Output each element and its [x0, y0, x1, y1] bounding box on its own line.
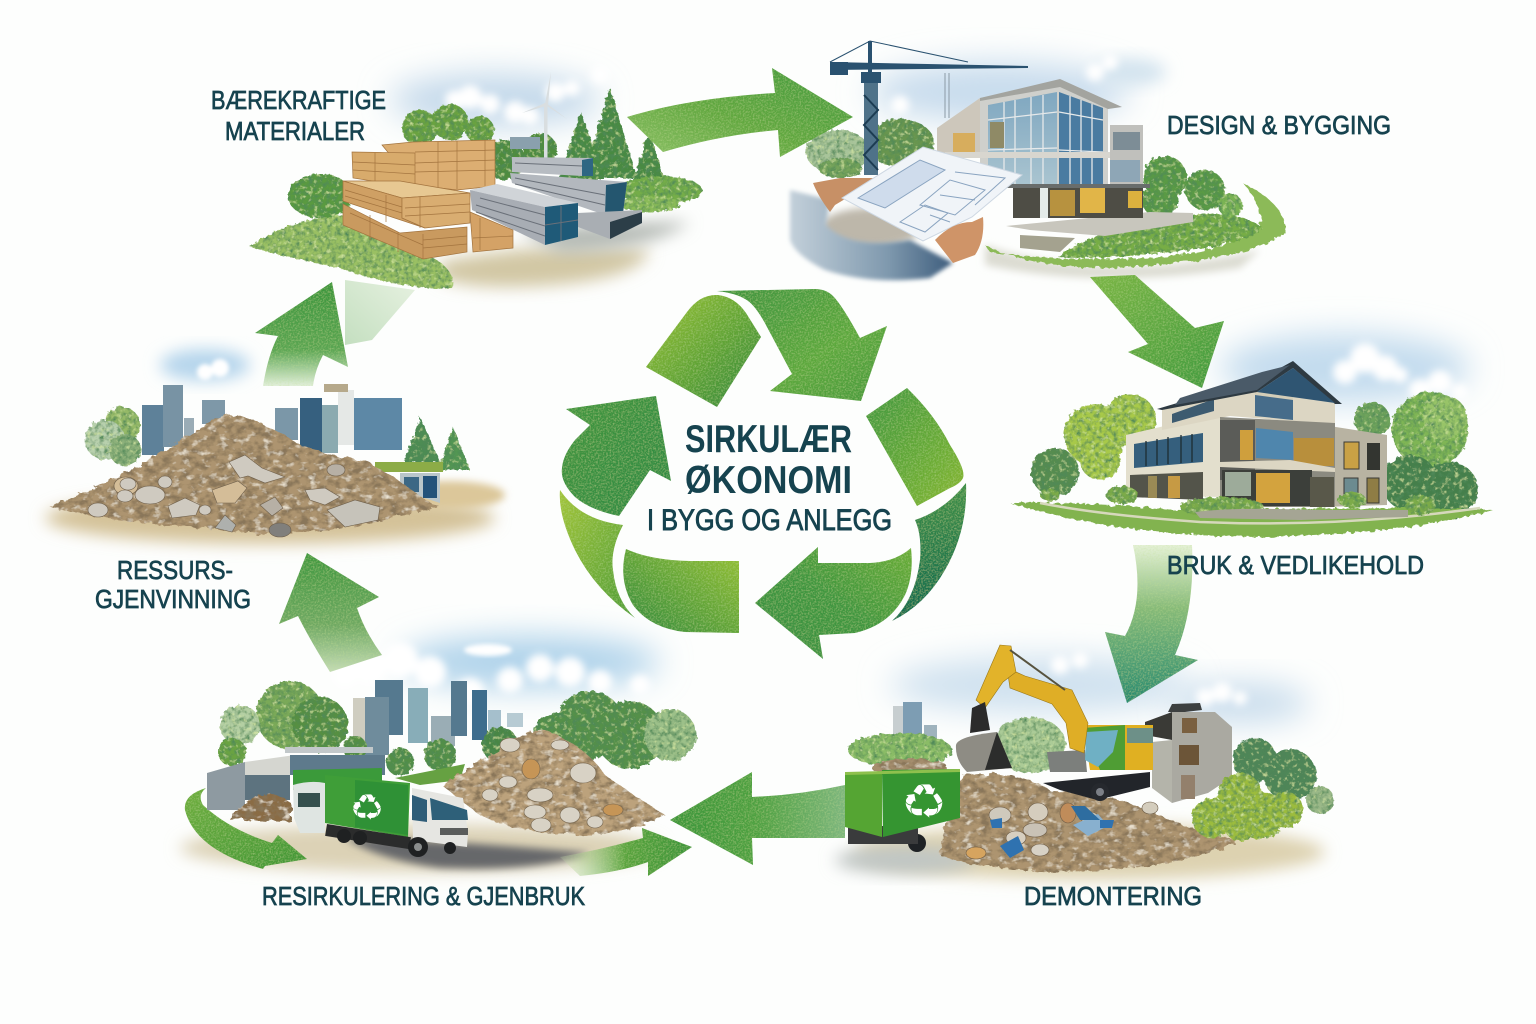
low structure and hedge [375, 462, 443, 503]
sky [160, 349, 250, 381]
terrace [1195, 509, 1408, 520]
yellow-green shrub [1192, 773, 1303, 841]
residential building [1126, 361, 1387, 507]
arrow: materials to design [627, 68, 853, 157]
background trees [848, 717, 1334, 814]
label: resource recovery: GJENVINNING [95, 584, 251, 614]
arrow: recycling to recovery [279, 553, 382, 672]
scene: sustainable materials [250, 66, 702, 288]
lumber stacks [343, 140, 513, 259]
arrow: design to use [1090, 275, 1224, 388]
label: resource recovery [95, 555, 251, 614]
city skyline [142, 384, 402, 455]
modern glass building [937, 79, 1150, 218]
label: design and construction: DESIGN & BYGGING [1167, 110, 1391, 140]
blueprint and hands [790, 147, 1022, 280]
trees [1031, 392, 1478, 518]
small curved arrow [185, 788, 307, 869]
green recycling truck [293, 775, 468, 857]
green container [845, 759, 960, 852]
label: sustainable materials: MATERIALER [225, 116, 365, 146]
background trees [806, 119, 934, 178]
sky [1220, 334, 1470, 402]
ground path and hedges [820, 156, 1286, 278]
rock pile [443, 730, 665, 835]
arrow: truck road arrow [560, 828, 692, 876]
recycling plant [207, 747, 385, 822]
ground: grass and sand [250, 214, 690, 288]
shrubs [1040, 486, 1435, 517]
central title: ØKONOMI [685, 459, 852, 502]
trees [85, 407, 470, 470]
rubble [940, 774, 1240, 872]
label: use and maintenance: BRUK & VEDLIKEHOLD [1167, 550, 1424, 580]
label: recycling and reuse: RESIRKULERING & GJENBRUK [262, 881, 586, 911]
lawn and path [1010, 503, 1493, 537]
label: sustainable materials [211, 85, 386, 146]
sky [870, 54, 1166, 122]
central title: SIRKULÆR [685, 418, 852, 461]
skyline [353, 680, 523, 755]
scene: use and maintenance [1010, 334, 1493, 537]
trees [218, 681, 696, 776]
scene: design and construction [790, 41, 1286, 280]
sky [333, 636, 660, 706]
ground [835, 824, 1325, 880]
label: sustainable materials: BÆREKRAFTIGE [211, 85, 386, 115]
scene: demolition [835, 645, 1334, 880]
scene: recycling and reuse [180, 636, 696, 872]
skyline [893, 702, 937, 739]
arrow: demolition to recycling [670, 772, 845, 865]
ground and road [180, 824, 660, 872]
steel beams [470, 157, 642, 245]
scene: resource recovery [45, 349, 505, 544]
tower crane [830, 41, 1028, 175]
sky [390, 66, 609, 126]
sandy ground [45, 481, 505, 544]
trees and wind turbine [288, 72, 702, 218]
central title: I BYGG OG ANLEGG [647, 504, 892, 537]
label: demolition: DEMONTERING [1024, 881, 1202, 911]
hedge [395, 764, 465, 785]
rubble pile [50, 415, 440, 537]
excavator [956, 645, 1153, 801]
sky [890, 652, 1310, 723]
central recycling symbol [560, 289, 966, 659]
arrow: use to demolition [1105, 545, 1198, 703]
demolished house [1145, 703, 1232, 803]
arrow: recovery to materials [255, 280, 415, 386]
label: resource recovery: RESSURS- [117, 555, 233, 585]
central title [647, 418, 892, 537]
